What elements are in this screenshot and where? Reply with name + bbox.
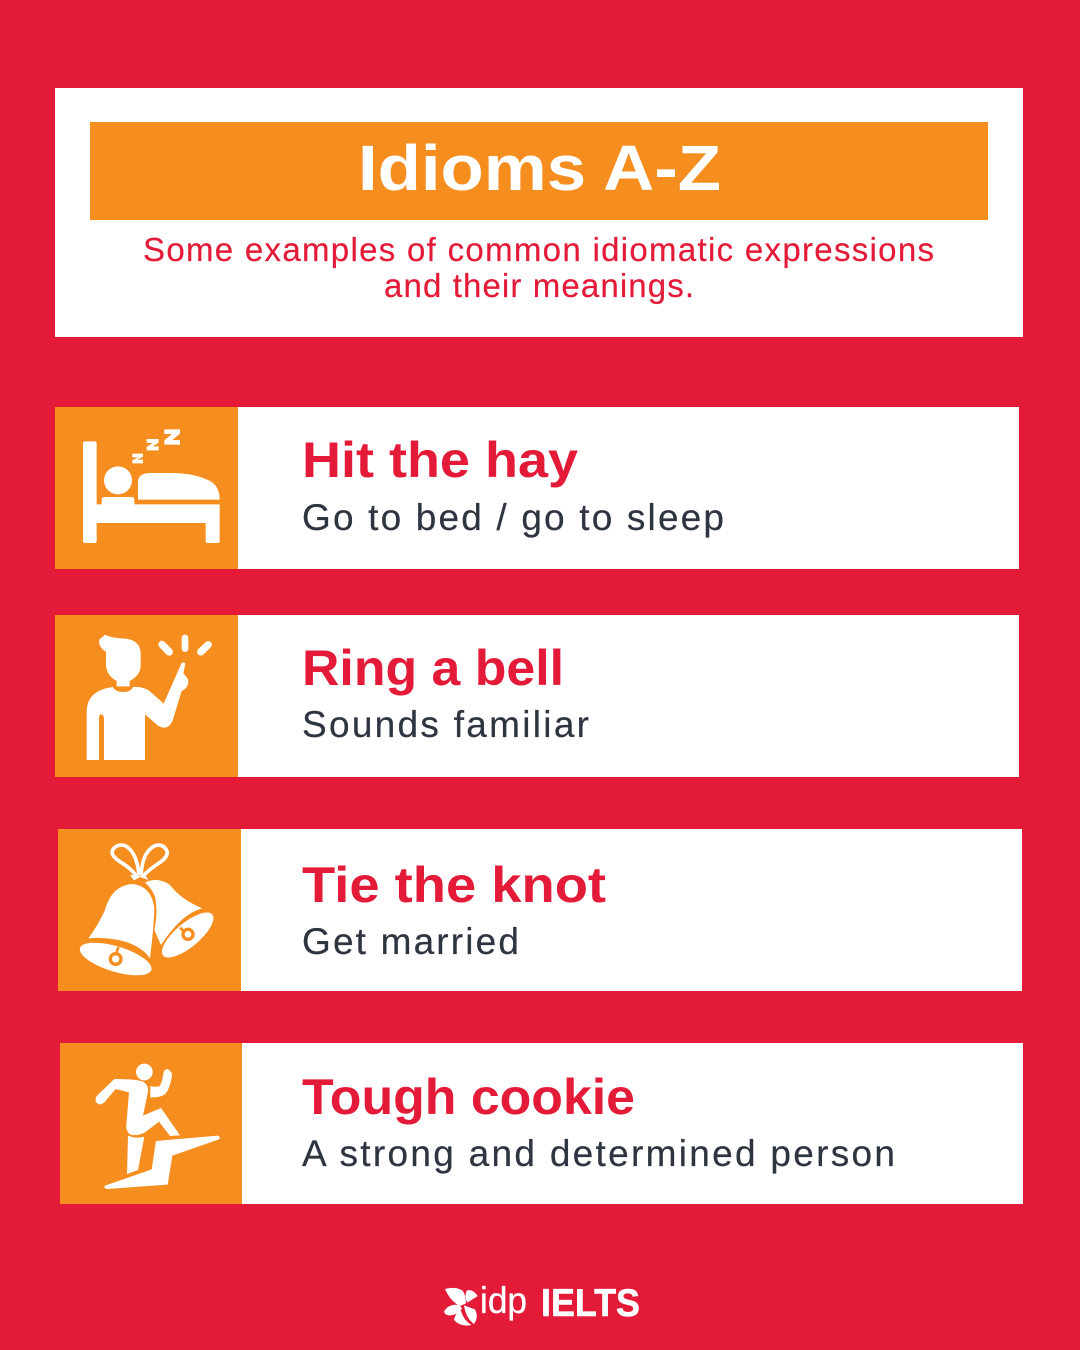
logo: idp IELTS xyxy=(444,1280,640,1326)
heading: Hit the hay xyxy=(302,432,578,488)
heading: Tough cookie xyxy=(302,1069,635,1125)
meaning: Go to bed / go to sleep xyxy=(302,497,724,538)
panel: tough cookie xyxy=(60,1043,1023,1204)
subtitle: Some examples of common idiomatic expressions xyxy=(143,231,934,268)
meaning: Sounds familiar xyxy=(302,704,589,745)
panel: hit the hay xyxy=(55,407,1019,569)
subtitle xyxy=(143,231,934,304)
meaning: Get married xyxy=(302,921,519,962)
icon: sleeping in bed xyxy=(83,429,220,543)
panel: ring a bell xyxy=(55,615,1019,777)
title banner: Idioms A-Z xyxy=(358,132,721,204)
panel: tie the knot xyxy=(58,829,1022,991)
icon: climbing figure xyxy=(96,1064,220,1189)
icon: idp leaf mark xyxy=(444,1288,478,1326)
header panel xyxy=(55,88,1023,337)
logo: idp IELTS: IELTS xyxy=(541,1282,640,1325)
logo: idp IELTS: idp xyxy=(480,1280,527,1321)
subtitle: and their meanings. xyxy=(384,267,694,304)
icon: wedding bells xyxy=(76,845,220,982)
title banner xyxy=(90,122,988,220)
heading: Tie the knot xyxy=(302,857,606,913)
icon: person remembering xyxy=(87,635,212,760)
heading: Ring a bell xyxy=(302,640,564,696)
meaning: A strong and determined person xyxy=(302,1133,895,1174)
